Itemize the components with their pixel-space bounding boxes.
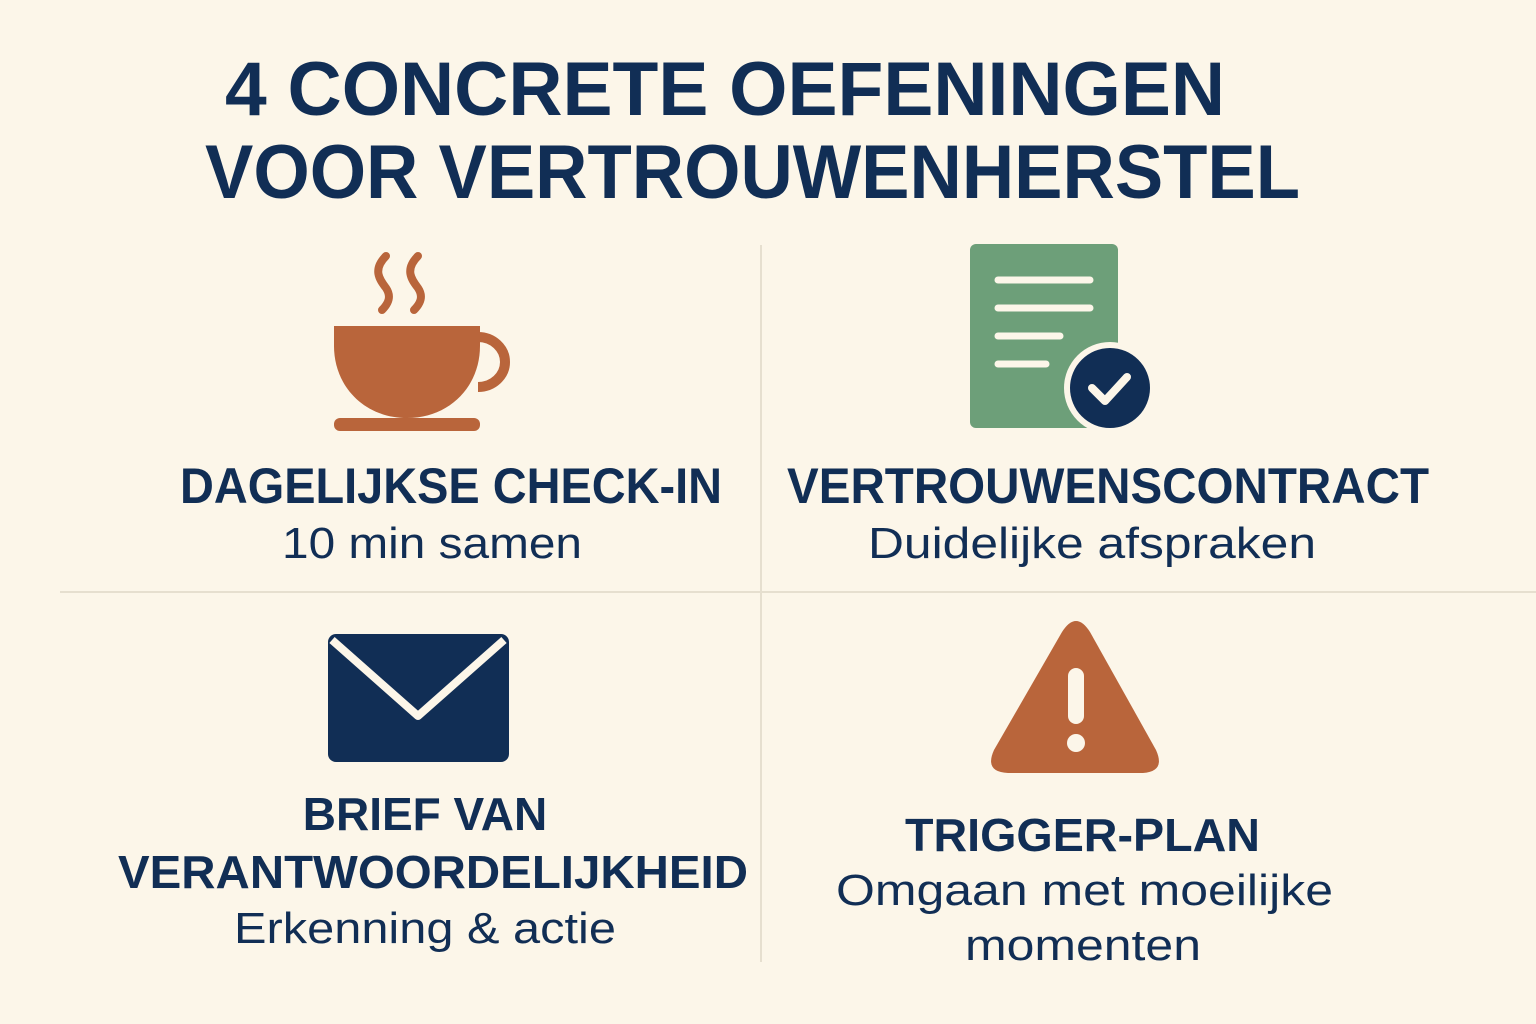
panel: dagelijkse check-in: 10 min samen [282,519,582,568]
icon: document with check [970,244,1156,434]
panel: dagelijkse check-in [180,256,722,568]
panel: trigger-plan: momenten [965,921,1201,970]
panel: trigger-plan: TRIGGER-PLAN [905,809,1260,861]
panel: vertrouwenscontract: VERTROUWENSCONTRACT [787,458,1429,514]
panel: dagelijkse check-in: DAGELIJKSE CHECK-IN [180,458,722,514]
panel: brief van verantwoordelijkheid: VERANTWOORDELIJKHEID [118,846,748,898]
panel: brief van verantwoordelijkheid: BRIEF VAN [303,788,547,840]
title [205,47,1300,215]
panel: brief van verantwoordelijkheid: Erkenning & actie [234,904,616,953]
panel: brief van verantwoordelijkheid [118,634,748,953]
icon: warning triangle [991,621,1159,773]
icon: envelope [328,634,509,762]
panel: vertrouwenscontract: Duidelijke afspraken [868,519,1316,568]
panel: trigger-plan: Omgaan met moeilijke [836,866,1333,915]
title: 4 CONCRETE OEFENINGEN [225,47,1225,132]
title: VOOR VERTROUWENHERSTEL [205,130,1300,215]
panel: trigger-plan [836,621,1333,970]
icon: coffee cup [334,256,505,431]
panel: vertrouwenscontract [787,244,1429,568]
